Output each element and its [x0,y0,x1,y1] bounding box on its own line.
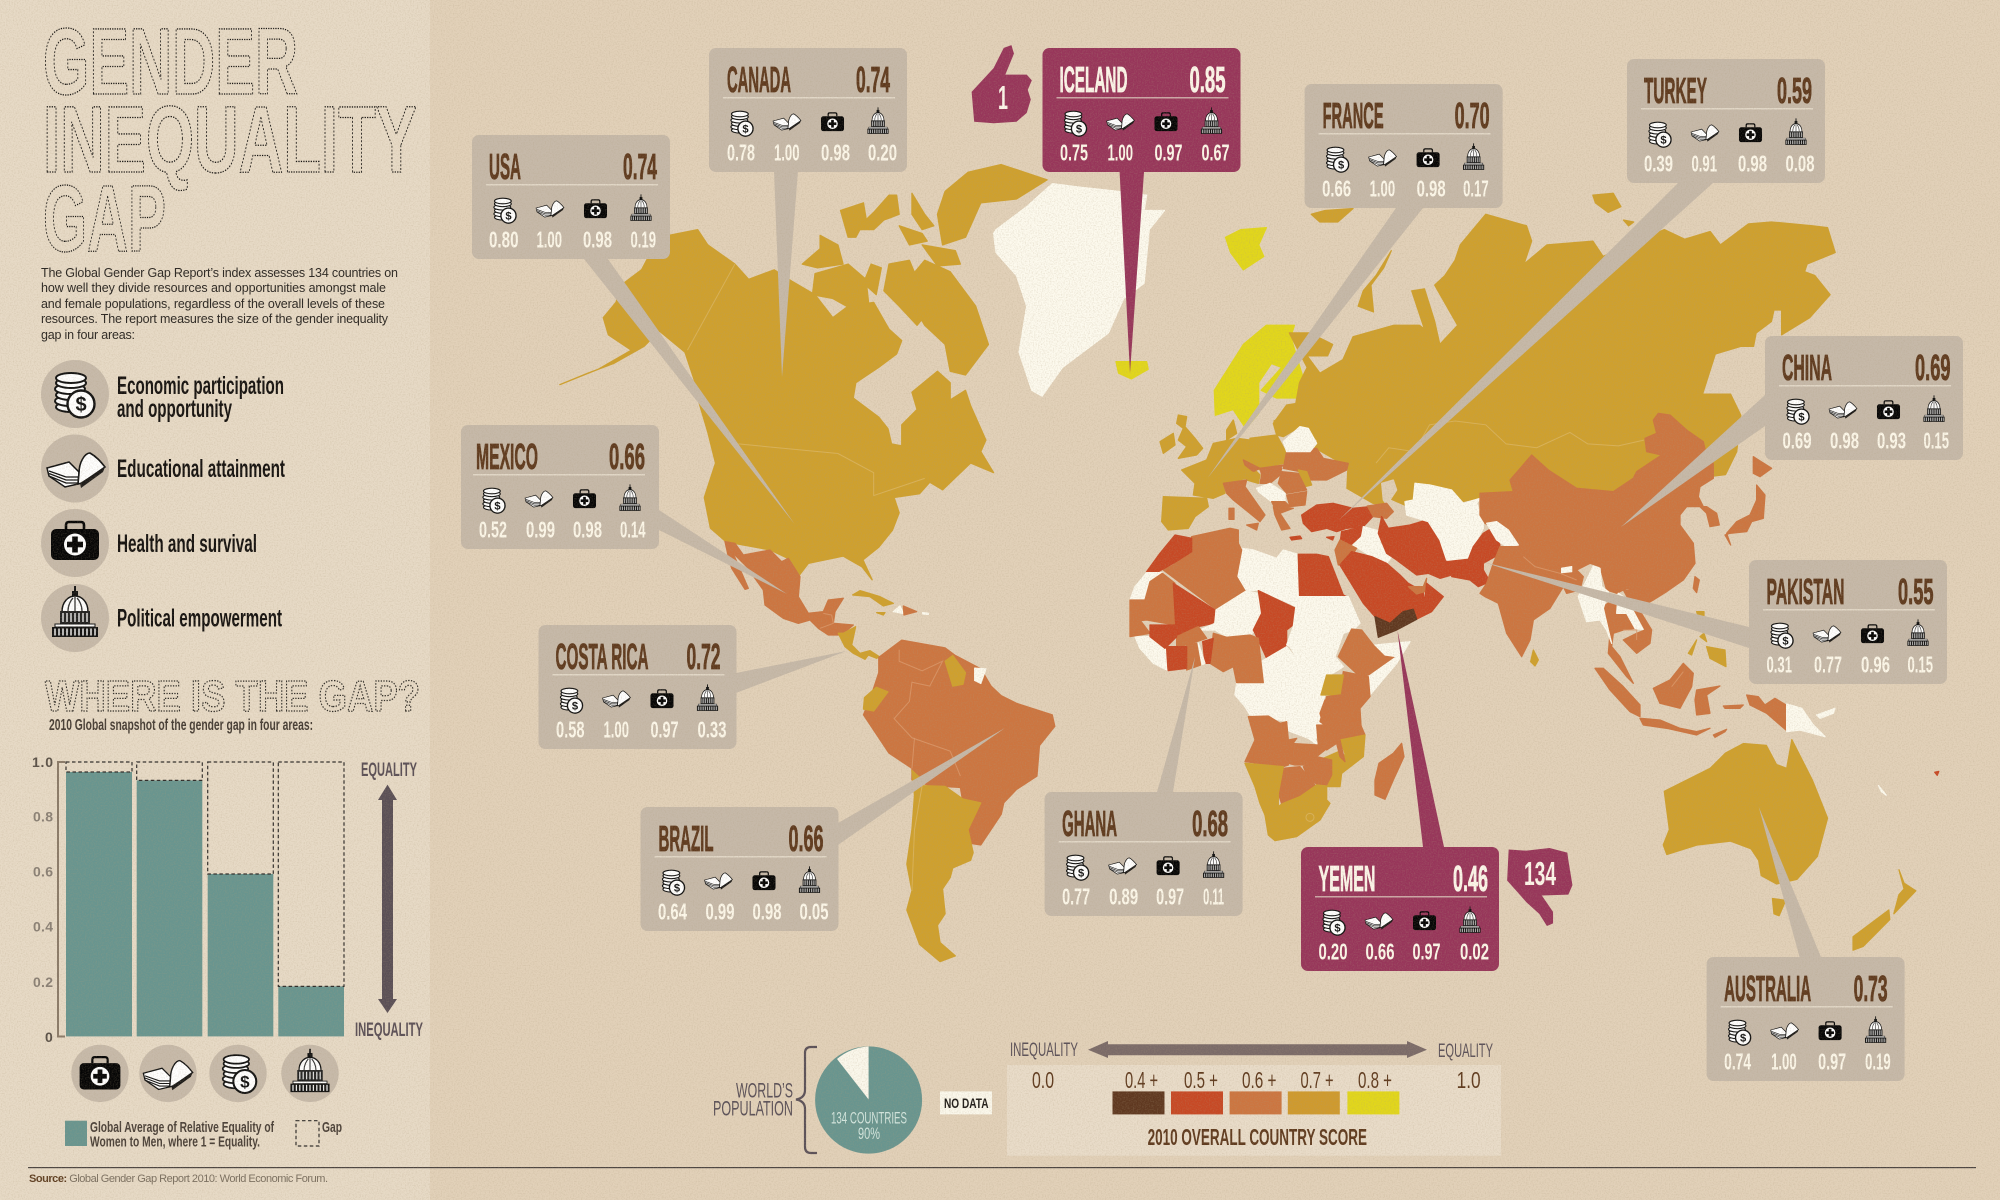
Ghana icons [1067,851,1224,880]
USA values: 1.00 [536,226,562,252]
Australia icons [1729,1016,1886,1045]
education key item [41,434,285,502]
Iceland values: 0.97 [1154,140,1182,166]
Ghana values: 0.97 [1156,884,1184,910]
education key item: Educational attainment [117,455,285,483]
key: four areas [41,360,285,652]
panel: China: CHINA [1782,347,1832,388]
world population pie: POPULATION [713,1098,793,1120]
Greenland [994,184,1164,396]
score legend: 0.6 + [1242,1067,1276,1093]
panel: USA [472,135,795,524]
Eurasia north [1214,193,1835,513]
Pakistan values: 0.96 [1861,652,1890,678]
Pakistan score: 0.55 [1898,571,1934,612]
Mexico and Central America [725,542,928,659]
Australia values: 0.97 [1818,1048,1846,1074]
panel: Costa Rica: 0.72 [686,636,720,677]
panel: France: 0.70 [1455,95,1490,136]
Costa Rica values: 0.97 [650,716,678,742]
Yemen values: 0.02 [1460,938,1489,964]
Australia values: 0.19 [1865,1048,1891,1074]
political key item [41,584,282,652]
Canada values [727,140,897,166]
world population pie: 134 COUNTRIES [831,1108,907,1128]
panel: Turkey: 0.59 [1777,70,1812,111]
Turkey values: 0.08 [1786,150,1815,176]
France values: 0.17 [1463,176,1489,202]
title: GENDER [43,9,298,115]
panel: Turkey: TURKEY [1644,70,1707,111]
Costa Rica icons [560,684,718,713]
panel: Yemen: 0.46 [1453,858,1488,899]
France icons [1327,143,1484,172]
dashed gap outlines [66,762,344,986]
chart legend: Women to Men, where 1 = Equality. [90,1133,260,1150]
equality arrow: INEQUALITY [355,1019,423,1041]
Yemen icons [1323,906,1481,935]
Mexico values: 0.52 [479,516,507,542]
Costa Rica values: 0.58 [556,716,585,742]
Mexico values: 0.98 [573,516,602,542]
panel: Canada: CANADA [727,59,791,100]
Pakistan values: 0.31 [1766,652,1792,678]
intro text: how well they divide resources and opportunities amongst male [41,281,386,295]
teal bars [66,772,344,1036]
subheading: where is the gap: WHERE IS THE GAP? [45,672,420,721]
Costa Rica values: 1.00 [604,716,629,742]
panel: Pakistan: PAKISTAN [1766,571,1844,612]
Costa Rica values [556,716,726,742]
world map [560,165,1939,962]
France values: 0.98 [1417,176,1446,202]
world population pie: WORLD’S [736,1080,793,1102]
Canada values: 0.78 [727,140,755,166]
France values [1322,176,1489,202]
Yemen values: 0.97 [1412,938,1440,964]
African countries [1298,554,1347,597]
title [43,9,417,272]
axis labels: 0 [45,1029,53,1045]
source: Source: Global Gender Gap Report 2010: World Economic Forum. [29,1173,328,1185]
economic key item: and opportunity [117,395,232,423]
Brazil icons [662,866,820,895]
chart legend [65,1119,342,1150]
China values [1782,428,1949,454]
axis labels: 0.8 [33,808,53,824]
panel: Brazil [640,728,1005,931]
icon: thumbs up [972,45,1032,123]
Brazil values: 0.98 [752,898,782,924]
Turkey icons [1649,118,1807,147]
Australia values: 1.00 [1771,1048,1797,1074]
icon: thumbs up: 1 [998,79,1008,116]
equality arrow: EQUALITY [361,759,417,781]
score legend: 1.0 [1457,1067,1481,1093]
Yemen values: 0.20 [1318,938,1348,964]
Ghana score: 0.68 [1192,803,1228,844]
Yemen values [1318,938,1489,964]
Southern Africa [1245,700,1404,841]
health key item: Health and survival [117,530,257,558]
panel: Yemen [1301,631,1499,971]
panel: Iceland [1042,48,1240,373]
bar chart [32,754,344,1045]
Brazil values: 0.99 [706,898,734,924]
intro text: and female populations, regardless of the overall levels of these [41,297,385,311]
China values: 0.15 [1924,428,1949,454]
Mexico icons [483,484,641,513]
panel: Brazil: BRAZIL [658,818,714,859]
Canada values: 0.98 [821,140,850,166]
Brazil values: 0.05 [800,898,829,924]
score legend: 0.4 + [1125,1067,1158,1093]
Iceland values: 0.67 [1202,140,1230,166]
intro text: resources. The report measures the size of the gender inequality [41,312,389,326]
axis labels: 1.0 [32,754,53,770]
Pakistan icons [1771,619,1929,648]
Oceania [1663,740,1939,950]
chart subtitle: 2010 Global snapshot of the gender gap in four areas: [49,717,313,734]
China score: 0.69 [1915,347,1950,388]
panel: Costa Rica [538,625,847,749]
world population pie [713,1046,922,1154]
Ghana values [1062,884,1224,910]
Pakistan values: 0.15 [1908,652,1933,678]
USA values [489,226,656,252]
panel: Brazil: 0.66 [788,818,824,859]
South America [863,640,1055,962]
Pakistan values [1766,652,1933,678]
panel: Ghana: 0.11 [1203,884,1224,910]
France values: 1.00 [1370,176,1395,202]
score legend: INEQUALITY [1010,1040,1078,1061]
score legend: EQUALITY [1438,1041,1493,1062]
equality arrow [355,759,423,1041]
axis labels: 0.6 [33,864,53,880]
Mexico values: 0.99 [526,516,555,542]
Scandinavia [1214,325,1305,429]
panel: Costa Rica: COSTA RICA [556,636,648,677]
China values: 0.93 [1877,428,1906,454]
Mexico values: 0.14 [620,516,646,542]
Turkey values [1644,150,1815,176]
Iceland score: 0.85 [1190,59,1226,100]
intro text: gap in four areas: [41,328,135,342]
Iceland icons [1064,107,1222,136]
panel: France: FRANCE [1323,95,1384,136]
panel: Australia: AUSTRALIA [1724,968,1811,1009]
panel: Yemen: YEMEN [1318,858,1376,899]
Ghana values: 0.77 [1062,884,1090,910]
China icons [1787,395,1945,424]
Yemen values: 0.66 [1366,938,1394,964]
panel: Mexico: MEXICO [476,436,538,477]
score legend: 0.8 + [1358,1067,1392,1093]
chart area icons [71,1045,339,1102]
panel: Australia [1707,807,1905,1081]
economic key item [41,360,284,428]
score legend: 2010 OVERALL COUNTRY SCORE [1148,1124,1367,1150]
USA icons [494,194,652,223]
Asia [1480,413,1835,737]
world population pie: 90% [858,1124,880,1143]
Pakistan values: 0.77 [1814,652,1842,678]
no data key: NO DATA [944,1095,988,1111]
Turkey values: 0.39 [1644,150,1673,176]
Yemen [1375,609,1417,637]
panel: Pakistan [1483,560,1947,684]
Europe, Middle East and Africa [1130,403,1500,747]
panel: Iceland: ICELAND [1060,59,1128,100]
Ghana values: 0.89 [1109,884,1138,910]
Iceland values: 0.75 [1060,140,1088,166]
Australia values [1724,1048,1891,1074]
panel: Ghana: GHANA [1062,803,1117,844]
score legend [1007,1040,1501,1156]
France values: 0.66 [1322,176,1351,202]
Canada values: 0.20 [868,140,897,166]
China values: 0.98 [1830,428,1859,454]
USA values: 0.19 [630,226,656,252]
China values: 0.69 [1782,428,1812,454]
panel: France [1208,84,1503,478]
chart legend: Global Average of Relative Equality of [90,1119,275,1136]
chart legend: Gap [322,1119,342,1136]
Brazil values [658,898,829,924]
panel: China [1621,336,1963,527]
USA values: 0.98 [583,226,612,252]
Mexico score: 0.66 [609,436,645,477]
Turkey values: 0.91 [1692,150,1717,176]
panel: Ghana [1045,657,1243,916]
axis labels [32,754,53,1045]
Iceland values: 1.00 [1108,140,1133,166]
Iceland values [1060,140,1230,166]
panel: Canada [709,48,907,377]
axis labels: 0.2 [33,974,53,990]
panel: Canada: 0.74 [856,59,890,100]
left sidebar panel [0,0,430,1200]
panel: USA: USA [489,146,521,187]
Costa Rica values: 0.33 [698,716,726,742]
score legend: 0.7 + [1300,1067,1334,1093]
score legend: 0.0 [1032,1067,1054,1093]
Canada values: 1.00 [774,140,800,166]
axis labels: 0.4 [33,918,53,934]
Russia and Kazakhstan [1274,214,1835,513]
Turkey values: 0.98 [1738,150,1767,176]
score legend: 0.5 + [1184,1067,1218,1093]
panel: Turkey [1339,59,1825,520]
intro text: The Global Gender Gap Report’s index assesses 134 countries on [41,266,398,280]
title: INEQUALITY [43,87,417,193]
Canada icons [731,107,889,136]
icon: thumbs down: 134 [1524,855,1556,892]
icon: thumbs down [1507,848,1572,926]
panel: USA: 0.74 [623,146,657,187]
intro text [41,266,398,342]
North America [560,165,1164,580]
political key item: Political empowerment [117,604,282,632]
Australia values: 0.74 [1724,1048,1751,1074]
health key item [41,509,257,577]
Brazil values: 0.64 [658,898,687,924]
panel: Mexico [461,425,787,594]
Mexico values [479,516,646,542]
panel: Australia: 0.73 [1854,968,1888,1009]
no data key [940,1091,992,1114]
economic key item: Economic participation [117,372,284,400]
title: GAP [43,166,166,272]
USA values: 0.80 [489,226,518,252]
Iceland [1116,362,1148,379]
